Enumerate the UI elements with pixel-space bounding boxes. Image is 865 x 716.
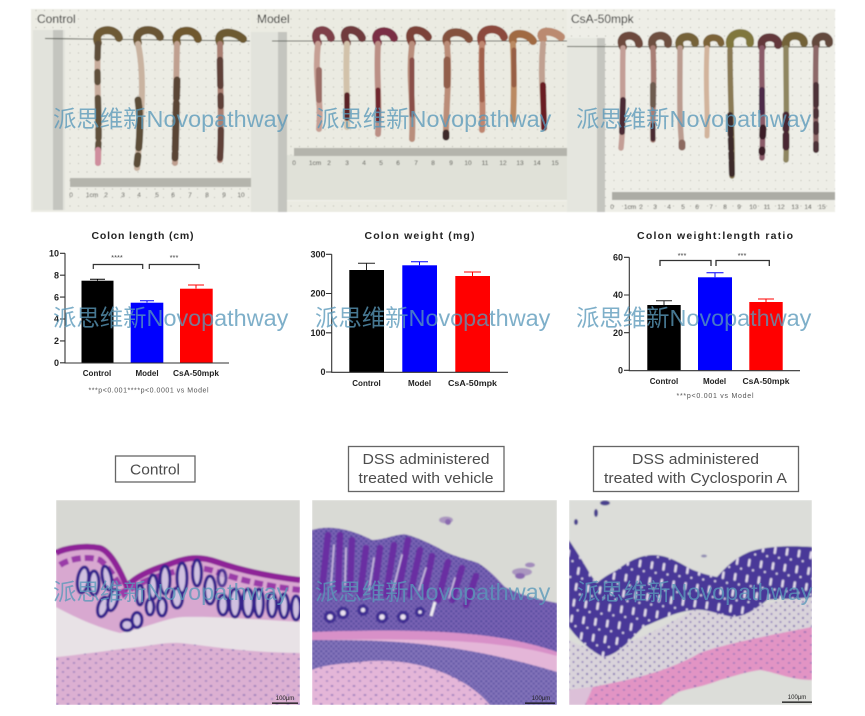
category labels: Model (703, 377, 726, 386)
micrograph: vehicle (312, 500, 557, 705)
ruler labels: control: 6 (171, 192, 175, 199)
ruler labels: control: 1cm (86, 192, 98, 199)
scale bar (525, 696, 555, 704)
watermarks: 派思维新Novopathway (53, 579, 289, 605)
tissue: mucosa (56, 547, 300, 633)
category labels (650, 377, 790, 386)
watermarks: 派思维新Novopathway (316, 106, 552, 132)
glands (322, 535, 476, 605)
category labels: Control (352, 379, 381, 388)
photo: CsA group (567, 9, 835, 212)
specimens: model colons (316, 29, 561, 139)
scale bar (782, 695, 812, 703)
axis values: 60 (613, 252, 623, 262)
ruler labels: CsA: 3 (653, 204, 657, 211)
axes and ticks (60, 253, 229, 363)
ruler labels: CsA: 13 (791, 204, 799, 211)
watermarks: 派思维新Novopathway (315, 305, 551, 331)
ruler labels: model: 15 (551, 160, 559, 167)
ruler labels: control: 8 (205, 192, 209, 199)
panel: colon photographs (31, 9, 835, 212)
ruler labels: CsA: 8 (723, 204, 727, 211)
photo: model group (251, 9, 567, 212)
footnote: ***p<0.001 vs Model (676, 393, 754, 400)
axes and ticks (624, 257, 800, 371)
ruler labels: model: 10 (464, 160, 472, 167)
ruler labels: CsA: 2 (639, 204, 643, 211)
ruler labels: CsA: 11 (764, 204, 771, 211)
axis values: 10 (49, 248, 59, 258)
label: control photo: Control (37, 12, 76, 26)
tissue: deep layer (312, 638, 557, 705)
ruler labels: CsA (610, 204, 826, 211)
significance brackets (660, 251, 769, 266)
axis values: 300 (310, 250, 326, 260)
label box: vehicle histology (348, 446, 504, 492)
axis values: 8 (54, 270, 59, 280)
watermarks: 派思维新Novopathway (577, 579, 813, 605)
ruler labels: CsA: 14 (804, 204, 812, 211)
significance brackets: *** (170, 253, 178, 262)
ruler labels: control: 4 (137, 192, 141, 199)
footnote: ***p<0.001****p<0.0001 vs Model (88, 388, 209, 394)
scale bar: 100μm (788, 695, 806, 701)
ruler labels: model: 4 (362, 160, 366, 167)
axis values: 40 (613, 290, 623, 300)
ruler labels: model: 11 (482, 160, 489, 167)
micrograph: cyclosporin (569, 500, 812, 705)
label box: cyclosporin histology (594, 446, 798, 492)
watermarks: 派思维新Novopathway (53, 305, 289, 331)
axis values: 20 (613, 328, 623, 338)
significance brackets: *** (738, 251, 746, 260)
label box: cyclosporin histology: treated with Cyclosporin A (604, 470, 787, 487)
category labels: Model (408, 379, 431, 388)
label box: control histology (116, 456, 195, 482)
ruler labels: model: 0 (292, 160, 296, 167)
axis values: 6 (54, 292, 59, 302)
tissue: muscle band (569, 627, 812, 705)
ruler labels: CsA: 10 (749, 204, 757, 211)
micrograph: control (56, 500, 300, 705)
bars (82, 279, 213, 363)
scale bar (272, 696, 298, 704)
photo: control group (31, 9, 251, 212)
scale bar: 100μm (532, 696, 550, 702)
axis values: 4 (54, 314, 59, 324)
axis values: 0 (54, 358, 59, 368)
ruler labels: model: 14 (533, 160, 541, 167)
category labels: CsA-50mpk (448, 379, 498, 388)
tissue: debris (574, 500, 707, 558)
ruler labels: CsA: 7 (709, 204, 713, 211)
specimens: CsA colons (621, 33, 829, 176)
ruler labels: model: 6 (396, 160, 400, 167)
axis values: 200 (310, 289, 326, 299)
category labels (352, 379, 498, 388)
ruler labels: CsA: 0 (610, 204, 614, 211)
chart: colon weight to length ratio (613, 230, 800, 400)
significance brackets: **** (111, 253, 123, 262)
significance brackets: *** (678, 251, 686, 260)
significance brackets (93, 253, 199, 269)
tissue: submucosa (56, 605, 300, 660)
ruler labels: control: 3 (121, 192, 125, 199)
ruler labels: model: 2 (327, 160, 331, 167)
tissue: mucosa crypts (569, 540, 812, 657)
label box: cyclosporin histology: DSS administered (632, 451, 759, 468)
chart: colon weight (310, 230, 508, 388)
ruler labels: control: 2 (104, 192, 108, 199)
ruler labels: CsA: 12 (777, 204, 785, 211)
ruler labels: model: 9 (449, 160, 453, 167)
axis values (49, 248, 59, 368)
axis values: 0 (618, 366, 623, 376)
label box: vehicle histology: DSS administered (362, 451, 490, 468)
ruler labels: CsA: 9 (737, 204, 741, 211)
axis values: 100 (310, 328, 326, 338)
label box: control histology: Control (130, 462, 180, 478)
chart title: Colon length (cm) (92, 230, 194, 242)
watermarks: 派思维新Novopathway (576, 305, 812, 331)
ruler labels: model (292, 160, 559, 167)
watermarks: 派思维新Novopathway (315, 579, 551, 605)
category labels: CsA-50mpk (173, 369, 220, 378)
tissue: loose submucosa (569, 597, 812, 690)
axis values (613, 252, 623, 376)
specimens: control colons (97, 30, 243, 168)
ruler labels: model: 7 (414, 160, 418, 167)
label: CsA photo: CsA-50mpk (571, 12, 635, 26)
tissue: inflamed mucosa (312, 528, 557, 656)
ruler labels: CsA: 5 (681, 204, 685, 211)
axis values: 0 (320, 367, 326, 377)
ruler labels: model: 1cm (309, 160, 321, 167)
bars (647, 273, 783, 370)
label: model photo: Model (257, 12, 290, 26)
ruler labels: CsA: 6 (695, 204, 699, 211)
ruler labels: CsA: 4 (667, 204, 671, 211)
ruler labels: control: 9 (222, 192, 226, 199)
axis values: 2 (54, 336, 59, 346)
tissue: muscle layer (56, 643, 300, 705)
ruler labels: control: 5 (155, 192, 159, 199)
chart title: Colon weight:length ratio (637, 230, 793, 242)
ruler labels: control: 0 (69, 192, 73, 199)
category labels: Control (650, 377, 678, 386)
ruler labels: model: 13 (516, 160, 524, 167)
scale bar: 100μm (276, 696, 294, 702)
ruler labels: control (69, 192, 245, 199)
label box: vehicle histology: treated with vehicle (358, 470, 494, 487)
ruler labels: CsA: 15 (818, 204, 826, 211)
tissue: debris (439, 516, 535, 579)
ruler labels: control: 10 (237, 192, 245, 199)
category labels: Control (83, 369, 111, 378)
crypts (76, 560, 300, 630)
watermarks: 派思维新Novopathway (53, 106, 289, 132)
ruler labels: model: 5 (379, 160, 383, 167)
chart title: Colon weight (mg) (364, 230, 474, 242)
ruler labels: CsA: 1cm (624, 204, 636, 211)
crypt cross-sections (326, 606, 424, 622)
ruler labels: model: 12 (499, 160, 507, 167)
watermarks (53, 106, 813, 605)
watermarks: 派思维新Novopathway (576, 106, 812, 132)
category labels: CsA-50mpk (742, 377, 790, 386)
axis values (310, 250, 326, 377)
axes and ticks (326, 254, 508, 372)
category labels: Model (135, 369, 159, 378)
ruler labels: model: 3 (345, 160, 349, 167)
ruler labels: control: 7 (188, 192, 192, 199)
lumen slit (431, 602, 435, 616)
category labels (83, 369, 220, 378)
ruler labels: model: 8 (431, 160, 435, 167)
chart: colon length (49, 230, 229, 394)
bars (349, 262, 490, 372)
